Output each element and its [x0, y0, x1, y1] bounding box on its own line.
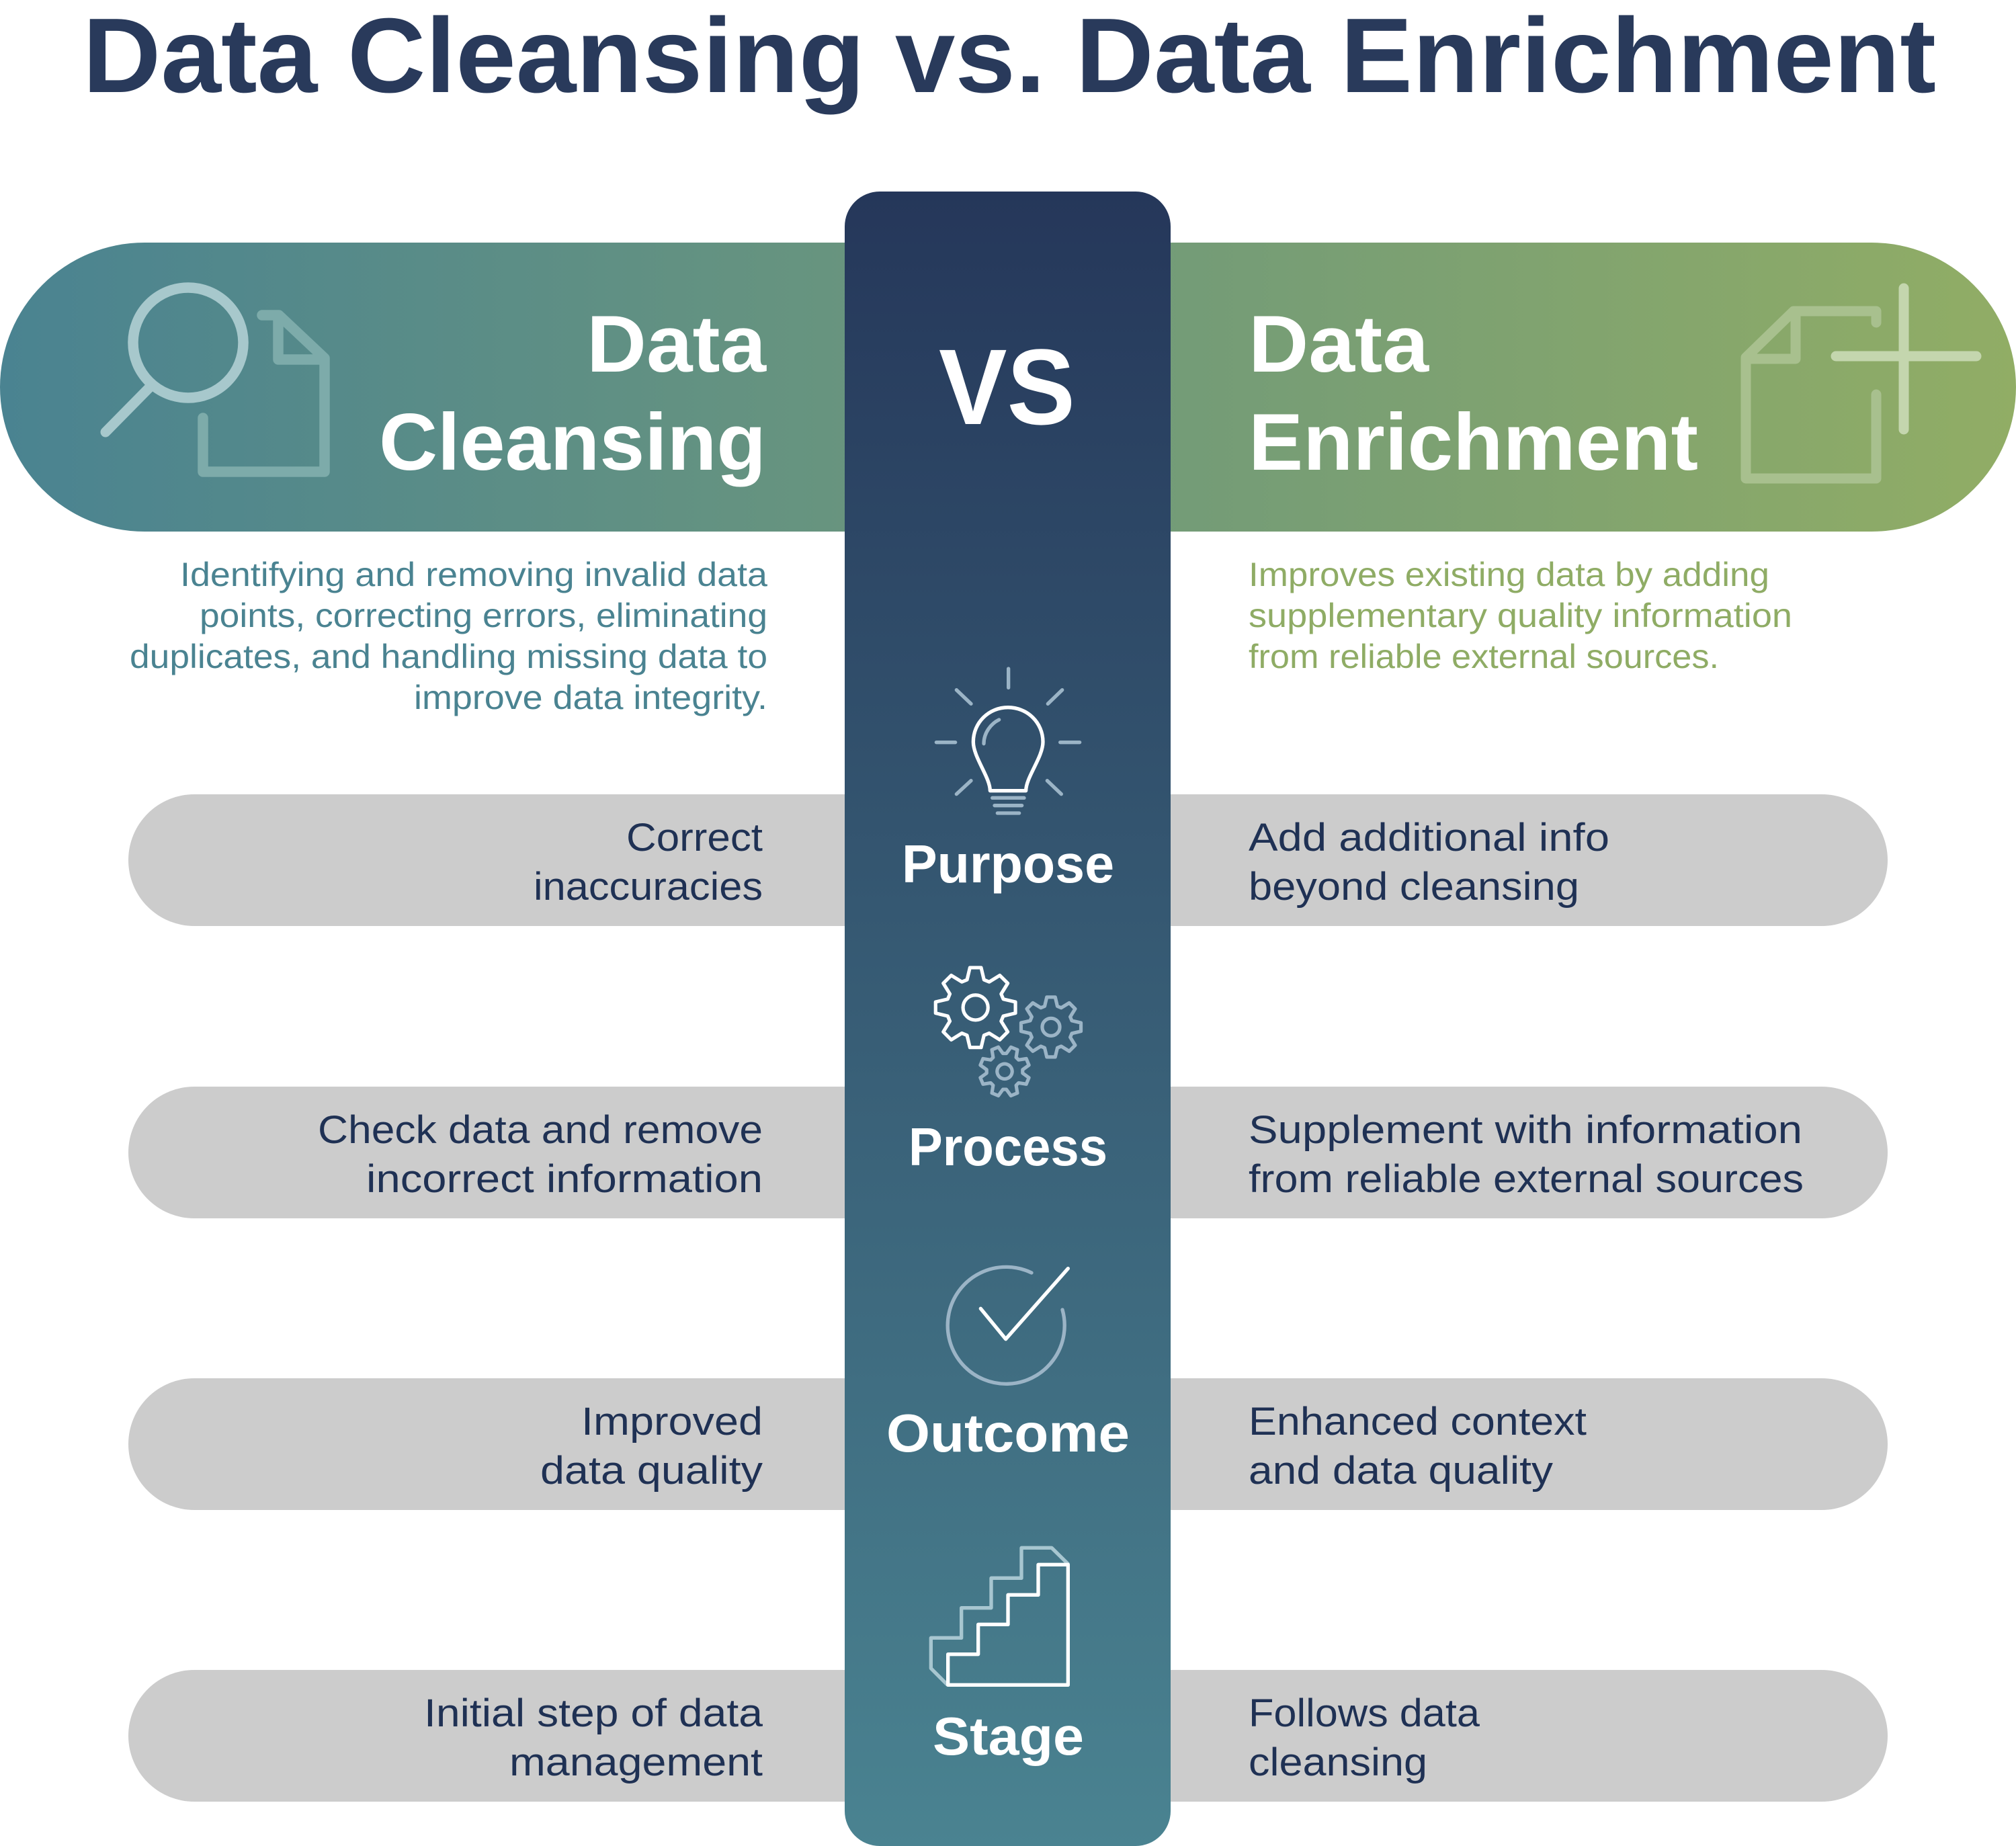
row: purpose	[128, 794, 1888, 926]
text: process cleansing: Check data and remove	[318, 1108, 763, 1152]
description: data cleansing	[130, 556, 767, 716]
description: data cleansing: improve data integrity.	[414, 679, 767, 716]
text: outcome enrichment: and data quality	[1249, 1449, 1553, 1493]
description: data cleansing: points, correcting errors, eliminating	[200, 597, 767, 634]
text: stage enrichment: cleansing	[1249, 1740, 1427, 1784]
icon: gears	[935, 968, 1081, 1104]
icon: magnifier over document	[106, 288, 325, 472]
text: process enrichment: Supplement with information	[1249, 1108, 1802, 1152]
description: data enrichment: Improves existing data by adding	[1249, 556, 1769, 593]
text: outcome cleansing: Improved	[581, 1400, 763, 1443]
text: stage cleansing	[424, 1691, 763, 1784]
text: outcome enrichment: Enhanced context	[1249, 1400, 1587, 1443]
center column	[845, 192, 1171, 1846]
heading: data enrichment	[1249, 299, 1698, 487]
icon: light bulb	[936, 669, 1080, 813]
heading: data enrichment: Data	[1249, 299, 1429, 389]
text: stage enrichment: Follows data	[1249, 1691, 1480, 1735]
icon: stairs	[931, 1548, 1068, 1685]
description: data enrichment: supplementary quality information	[1249, 597, 1792, 634]
text: process enrichment	[1249, 1108, 1804, 1201]
label: purpose: Purpose	[902, 834, 1114, 894]
icon: check mark in circle	[948, 1267, 1068, 1384]
row: process	[128, 1087, 1888, 1218]
row: stage	[128, 1670, 1888, 1802]
header band	[0, 243, 2016, 532]
heading: data enrichment: Enrichment	[1249, 397, 1698, 487]
text: outcome cleansing: data quality	[540, 1449, 763, 1493]
text: outcome cleansing	[540, 1400, 763, 1493]
vs label: VS	[939, 327, 1075, 447]
heading: data cleansing	[379, 299, 767, 487]
heading: data cleansing: Data	[587, 299, 767, 389]
text: outcome enrichment	[1249, 1400, 1587, 1493]
text: process enrichment: from reliable external sources	[1249, 1157, 1804, 1201]
text: process cleansing	[318, 1108, 763, 1201]
row: outcome	[128, 1378, 1888, 1510]
description: data enrichment: from reliable external sources.	[1249, 638, 1719, 675]
icon: document with plus	[1746, 288, 1976, 478]
text: purpose cleansing: inaccuracies	[534, 865, 763, 909]
text: purpose cleansing	[534, 816, 763, 909]
text: purpose enrichment: beyond cleansing	[1249, 865, 1579, 909]
label: process: Process	[909, 1117, 1107, 1177]
description: data enrichment	[1249, 556, 1792, 675]
description: data cleansing: Identifying and removing invalid data	[180, 556, 767, 593]
title: Data Cleansing vs. Data Enrichment	[83, 0, 1936, 115]
heading: data cleansing: Cleansing	[379, 397, 766, 487]
text: stage cleansing: management	[509, 1740, 763, 1784]
text: purpose enrichment: Add additional info	[1249, 816, 1609, 859]
description: data cleansing: duplicates, and handling missing data to	[130, 638, 767, 675]
text: purpose enrichment	[1249, 816, 1609, 909]
text: process cleansing: incorrect information	[366, 1157, 763, 1201]
text: purpose cleansing: Correct	[626, 816, 763, 859]
text: stage cleansing: Initial step of data	[424, 1691, 763, 1735]
text: stage enrichment	[1249, 1691, 1480, 1784]
label: outcome: Outcome	[886, 1403, 1130, 1463]
label: stage: Stage	[933, 1706, 1084, 1766]
